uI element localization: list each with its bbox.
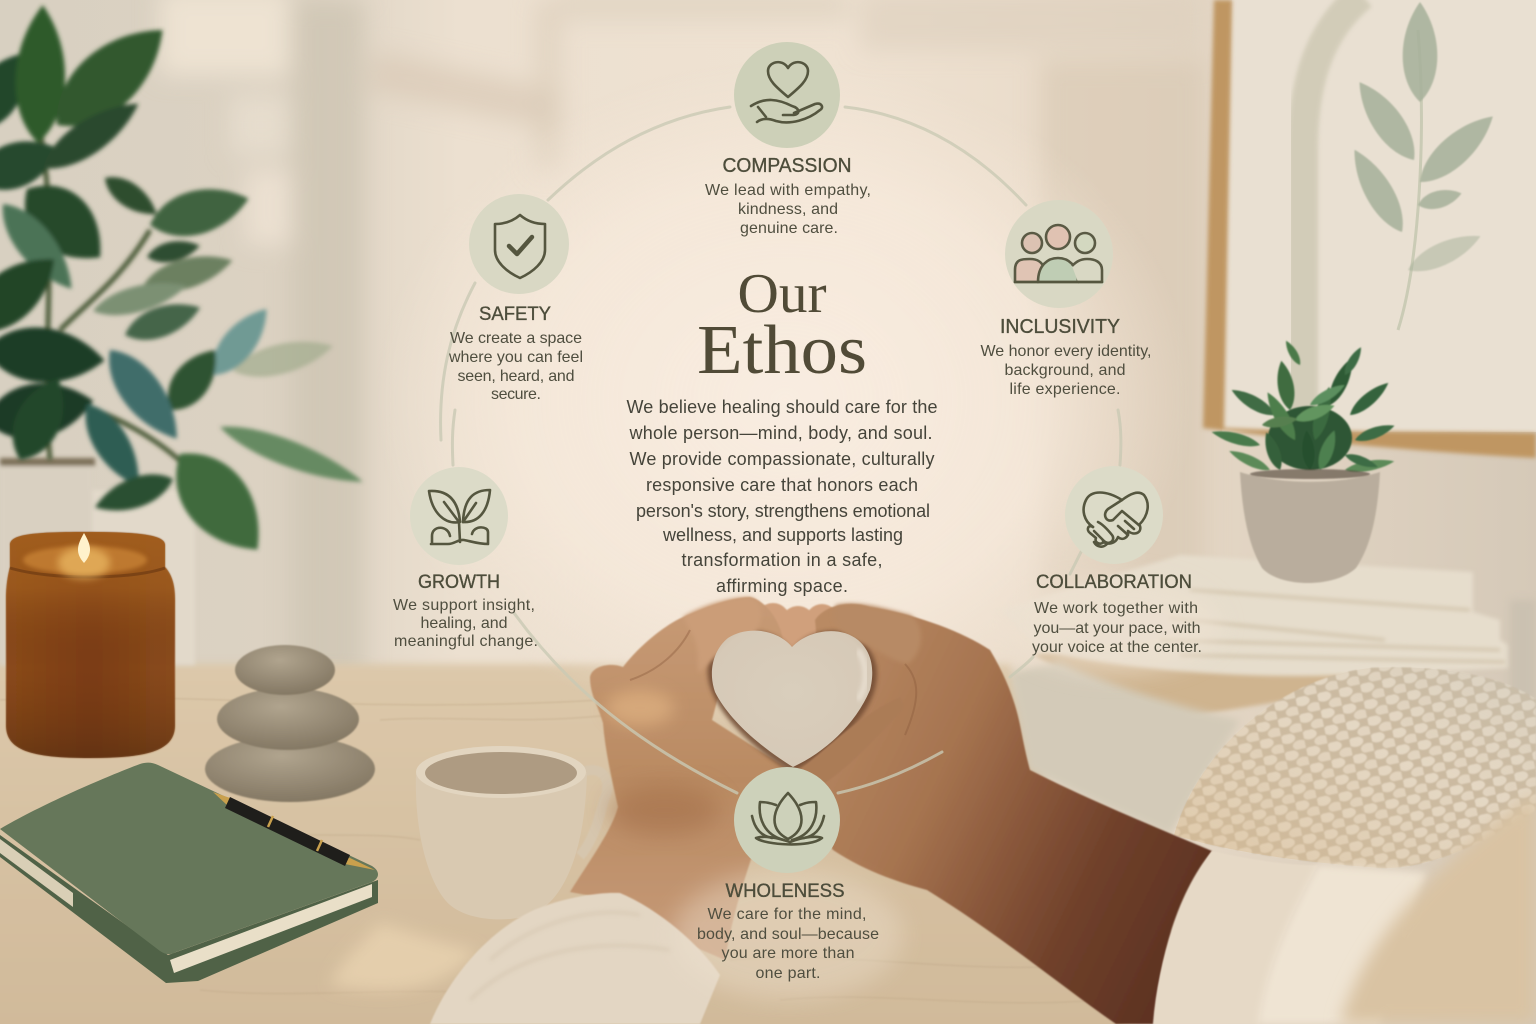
cover	[0, 763, 378, 954]
description: wholeness: body, and soul—because	[697, 926, 879, 943]
knit blanket and pillow	[1010, 662, 1536, 868]
description: safety: where you can feel	[448, 349, 583, 366]
label: growth: GROWTH	[418, 572, 500, 593]
value: growth	[393, 467, 538, 650]
small potted plant	[1210, 339, 1396, 583]
page block	[170, 884, 372, 973]
description: safety	[448, 330, 583, 403]
ethos statement paragraph: We provide compassionate, culturally	[630, 449, 934, 469]
description: wholeness	[697, 906, 879, 982]
sleeves	[430, 793, 1536, 1024]
ethos statement paragraph: transformation in a safe,	[682, 550, 882, 570]
description: compassion: genuine care.	[740, 220, 838, 237]
description: safety: We create a space	[450, 330, 582, 347]
stacked stones	[205, 645, 375, 802]
ethos statement paragraph: person's story, strengthens emotional	[636, 501, 930, 521]
ethos statement paragraph: whole person—mind, body, and soul.	[628, 423, 932, 443]
hands holding heart stone	[570, 597, 1212, 1024]
title: Our	[738, 263, 827, 325]
description: inclusivity: We honor every identity,	[980, 343, 1152, 360]
icon: heart in hand	[734, 42, 840, 148]
left wrist and hand	[570, 597, 790, 960]
value: safety	[448, 194, 583, 403]
candle	[6, 532, 175, 758]
ethos statement paragraph: affirming space.	[716, 576, 848, 596]
ethos statement paragraph	[626, 397, 938, 596]
title: Ethos	[697, 312, 867, 389]
description: collaboration: your voice at the center.	[1032, 639, 1202, 656]
green notebook with pen	[0, 763, 378, 983]
label: collaboration: COLLABORATION	[1036, 572, 1192, 593]
value: compassion	[705, 42, 871, 237]
label: safety: SAFETY	[479, 304, 551, 325]
center glow behind text	[375, 60, 1195, 740]
description: inclusivity	[980, 343, 1152, 398]
text glow over scene	[673, 577, 1220, 1000]
ethos statement paragraph: responsive care that honors each	[646, 475, 918, 495]
right thumb	[833, 604, 921, 664]
icon: lotus	[734, 767, 840, 873]
foliage	[0, 4, 367, 570]
description: inclusivity: life experience.	[1010, 381, 1120, 398]
description: wholeness: We care for the mind,	[708, 906, 866, 923]
table top	[0, 664, 1130, 1024]
pen	[213, 792, 375, 870]
description: growth: healing, and	[420, 615, 508, 632]
heart highlight	[858, 650, 866, 700]
icon: handshake	[1065, 466, 1163, 564]
description: growth: meaningful change.	[394, 633, 538, 650]
description: growth: We support insight,	[393, 597, 535, 614]
ring connecting values	[441, 107, 1121, 793]
right palm fingers under heart	[800, 697, 903, 783]
value: inclusivity	[980, 200, 1152, 398]
description: wholeness: one part.	[756, 965, 820, 982]
heart stone	[712, 631, 872, 767]
label: compassion: COMPASSION	[722, 155, 852, 177]
right forearm and hand	[790, 604, 1212, 1024]
description: safety: secure.	[491, 386, 541, 403]
back cover and spine	[0, 835, 378, 983]
label: wholeness: WHOLENESS	[726, 881, 844, 902]
books on tray	[1000, 555, 1536, 716]
description: compassion	[705, 182, 871, 237]
description: compassion: kindness, and	[738, 201, 838, 218]
title	[697, 263, 867, 389]
value: wholeness	[697, 767, 879, 982]
icon: shield with check	[469, 194, 569, 294]
shadow around heart	[708, 631, 877, 773]
value: collaboration	[1032, 466, 1202, 656]
description: growth	[393, 597, 538, 650]
description: compassion: We lead with empathy,	[705, 182, 871, 199]
plant pots	[0, 458, 195, 665]
left potted plant	[0, 4, 367, 665]
coffee mug	[416, 746, 607, 919]
framed botanical print	[1203, 0, 1536, 458]
description: collaboration: We work together with	[1034, 600, 1198, 617]
description: collaboration: you—at your pace, with	[1034, 620, 1200, 637]
light on left hand	[606, 690, 674, 726]
icon: sprout	[410, 467, 508, 565]
hand creases	[630, 630, 916, 735]
fingertips behind heart	[754, 603, 839, 654]
description: safety: seen, heard, and	[458, 368, 574, 385]
label: inclusivity: INCLUSIVITY	[1000, 316, 1120, 338]
left thumb	[683, 597, 761, 672]
wrist shade	[610, 785, 720, 835]
description: inclusivity: background, and	[1004, 362, 1126, 379]
ethos statement paragraph: wellness, and supports lasting	[662, 525, 903, 545]
description: wholeness: you are more than	[722, 945, 854, 962]
description: collaboration	[1032, 600, 1202, 656]
icon: group of people	[1005, 200, 1113, 308]
ethos statement paragraph: We believe healing should care for the	[626, 397, 938, 417]
